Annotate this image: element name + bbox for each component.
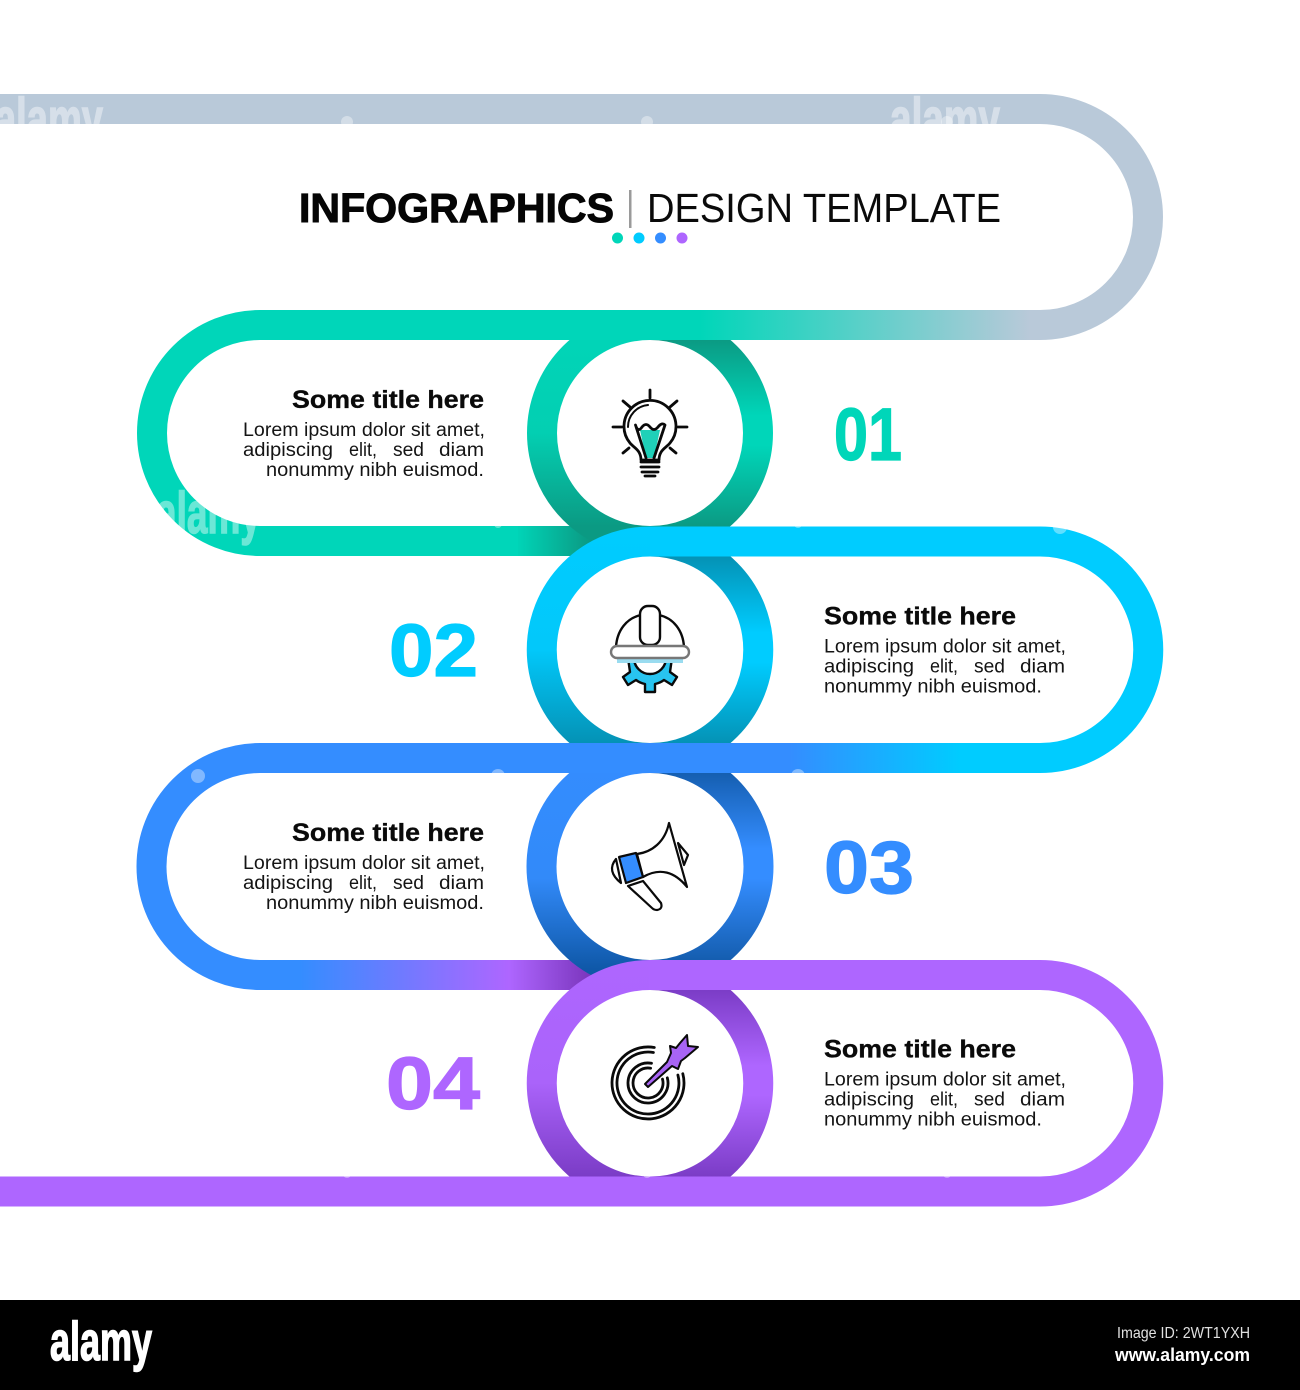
text block: step 3: Lorem ipsum dolor sit amet,: [243, 853, 485, 874]
title dots: [612, 232, 688, 244]
text block: step 4: elit,: [930, 1090, 958, 1110]
text block: step 1: nonummy nibh euismod.: [266, 460, 484, 481]
text block: step 3: elit,: [349, 873, 377, 894]
text block: step 3: [243, 819, 485, 914]
text block: step 4: nonummy nibh euismod.: [824, 1110, 1042, 1130]
text block: step 1: diam: [439, 440, 484, 461]
ribbon: step 2 to 3 connecting band: [260, 743, 962, 773]
text block: step 2: [824, 602, 1066, 698]
ribbon: step 2 band and right curve: [650, 542, 1148, 758]
ring: step 3: [542, 758, 758, 975]
icon: target with arrow: [612, 1035, 698, 1119]
icon: light bulb: [613, 390, 687, 476]
text block: step 3: diam: [439, 873, 484, 894]
footer bar: www.alamy.com: [1114, 1345, 1250, 1365]
text block: step 2: nonummy nibh euismod.: [824, 676, 1042, 698]
text block: step 1: [243, 386, 485, 481]
text block: step 4: [824, 1036, 1066, 1130]
text block: step 3: sed: [393, 873, 424, 894]
ribbon: step 1 upper band fading to grey: [260, 310, 1041, 340]
ring: step 2: [542, 542, 758, 758]
text block: step 2: Some title here: [824, 602, 1016, 630]
footer bar: alamy: [50, 1310, 152, 1372]
text block: step 1: sed: [393, 440, 424, 461]
text block: step 1: Some title here: [292, 386, 484, 414]
text block: step 2: Lorem ipsum dolor sit amet,: [824, 636, 1066, 658]
number: 04: 04: [386, 1042, 480, 1125]
ribbon: grey top band and right curve: [0, 109, 1148, 325]
ring: step 4: [542, 975, 758, 1192]
text block: step 3: Some title here: [292, 819, 484, 847]
text block: step 3: nonummy nibh euismod.: [266, 893, 484, 914]
text block: step 4: adipiscing: [824, 1090, 914, 1110]
title: [299, 185, 1001, 231]
icon: megaphone: [612, 823, 688, 910]
text block: step 1: Lorem ipsum dolor sit amet,: [243, 420, 485, 441]
ribbon: step 1 lower band and left curve: [152, 325, 650, 541]
text block: step 2: elit,: [930, 656, 958, 678]
text block: step 4: diam: [1020, 1090, 1065, 1110]
watermark marks: alamy: [156, 481, 261, 546]
watermark marks: alamy: [890, 87, 1000, 152]
title: INFOGRAPHICS: [299, 185, 614, 231]
footer bar: [0, 1300, 1300, 1390]
icon: hard hat with gear: [611, 606, 689, 692]
title: DESIGN TEMPLATE: [647, 185, 1001, 231]
text block: step 2: adipiscing: [824, 656, 914, 678]
number: 03: 03: [824, 826, 914, 909]
ribbon: step 4 band, right curve and bottom exit: [0, 975, 1148, 1192]
text block: step 2: sed: [974, 656, 1005, 678]
text block: step 4: Some title here: [824, 1036, 1016, 1064]
number: 01: 01: [834, 393, 902, 476]
ribbon: step 3 lower band and left curve: [152, 758, 300, 975]
text block: step 1: adipiscing: [243, 440, 333, 461]
text block: step 2: diam: [1020, 656, 1065, 678]
text block: step 1: elit,: [349, 440, 377, 461]
text block: step 4: sed: [974, 1090, 1005, 1110]
ring: step 1: [542, 325, 758, 541]
number: 02: 02: [389, 609, 478, 692]
text block: step 4: Lorem ipsum dolor sit amet,: [824, 1070, 1066, 1090]
footer bar: Image ID: 2WT1YXH: [1117, 1325, 1250, 1342]
watermark marks: [0, 87, 1067, 1178]
ribbon: step 3 lower band blue to purple gradient: [298, 960, 650, 990]
text block: step 3: adipiscing: [243, 873, 333, 894]
